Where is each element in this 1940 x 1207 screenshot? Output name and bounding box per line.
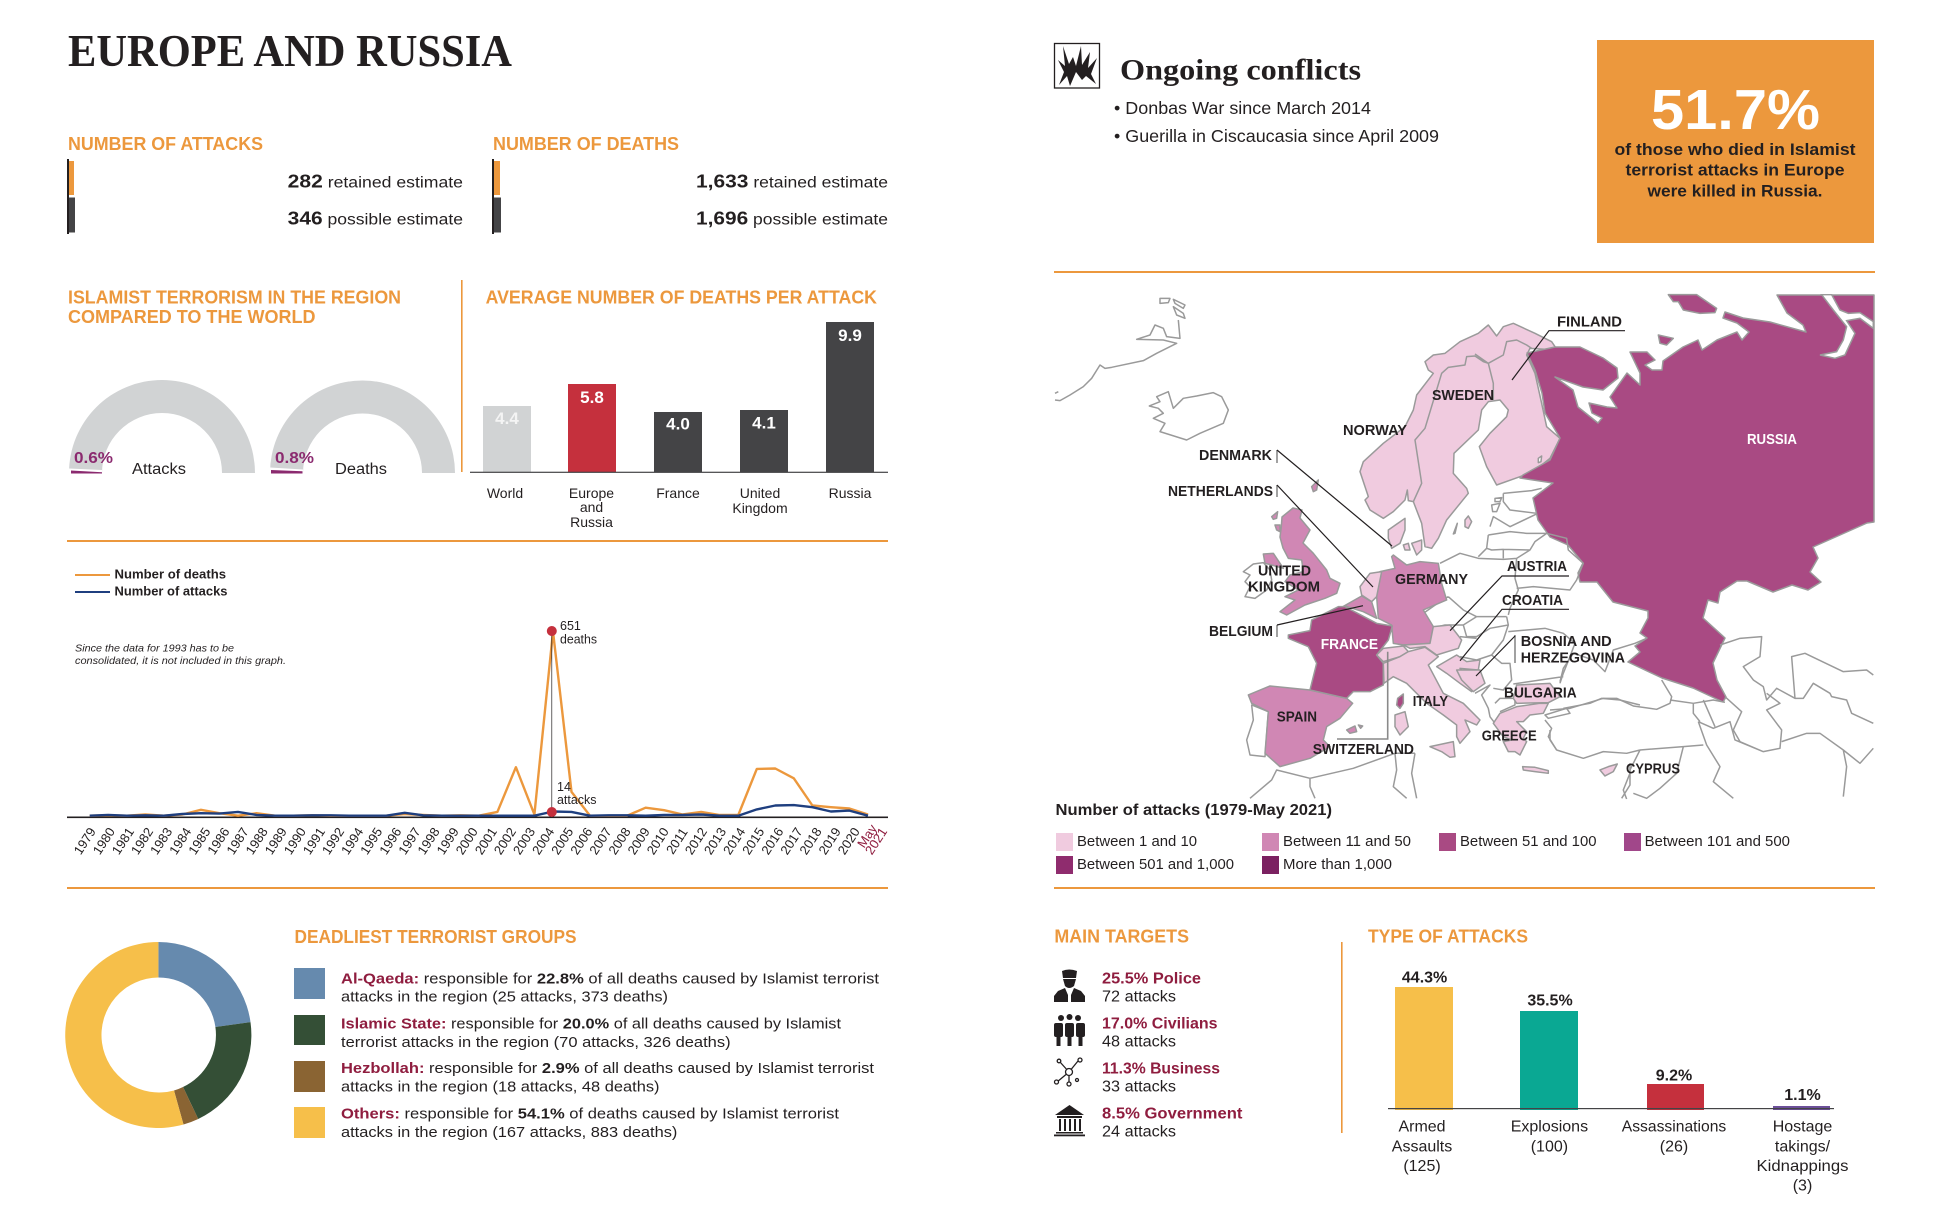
map: country labels: UNITED (1258, 563, 1311, 580)
legend: number of attacks map: Between 501 and 1,000 (1077, 857, 1234, 873)
heading: ongoing conflicts: Ongoing conflicts (1120, 54, 1361, 86)
legend item: Hezbollah: attacks in the region (18 attacks, 48 deaths) (341, 1078, 660, 1096)
series: attacks (90, 805, 868, 816)
map: country labels: AUSTRIA (1507, 558, 1567, 575)
panel: average deaths per attack (470, 288, 888, 530)
legend: number of attacks map (1056, 802, 1790, 874)
map: country labels: CYPRUS (1626, 760, 1680, 777)
legend item: Others: attacks in the region (167 attacks, 883 deaths) (341, 1124, 677, 1141)
legend item: Others (294, 1106, 840, 1141)
x axis labels: 2010 (644, 825, 672, 857)
title: EUROPE AND RUSSIA (68, 25, 512, 76)
list: conflicts: • Donbas War since March 2014 (1114, 98, 1371, 118)
map: country labels: CROATIA (1502, 592, 1563, 609)
x axis labels: 1999 (433, 825, 462, 857)
bar chart: average deaths: Russia (570, 514, 613, 530)
bar chart: type of attacks: (26) (1660, 1139, 1688, 1156)
bars: attacks estimates (67, 159, 75, 234)
bar chart: type of attacks: 35.5% (1527, 993, 1573, 1010)
x axis labels: 2003 (510, 825, 538, 857)
bar chart: type of attacks: (3) (1793, 1178, 1812, 1195)
callout: 51.7%: were killed in Russia. (1646, 182, 1822, 200)
legend item: Al-Qaeda: attacks in the region (25 attacks, 373 deaths) (341, 989, 668, 1006)
x axis labels: 1997 (395, 825, 424, 857)
bar chart: type of attacks (1388, 969, 1848, 1195)
bar chart: average deaths: Kingdom (732, 500, 788, 516)
bar chart: type of attacks: Hostage (1773, 1119, 1832, 1136)
list: conflicts: • Guerilla in Ciscaucasia since April 2009 (1114, 126, 1439, 146)
x axis labels: 2008 (605, 825, 634, 857)
heading: number of deaths: NUMBER OF DEATHS (493, 134, 679, 154)
bar chart: type of attacks: Kidnappings (1756, 1158, 1848, 1175)
map: country labels (1168, 314, 1797, 777)
text: business: 11.3% Business (1102, 1061, 1220, 1078)
bar chart: type of attacks: (100) (1531, 1139, 1568, 1156)
value: retained attacks: 282 retained estimate (288, 170, 463, 192)
bar chart: average deaths: France (656, 485, 700, 501)
bar chart: type of attacks: takings/ (1775, 1139, 1831, 1156)
callout: 51.7%: 51.7% (1651, 78, 1820, 142)
panel: type of attacks (1368, 927, 1848, 1195)
map: country labels: SWEDEN (1432, 387, 1494, 404)
value: possible attacks: 346 possible estimate (288, 208, 463, 228)
x axis labels: 1981 (109, 825, 137, 857)
text: police: 72 attacks (1102, 989, 1176, 1006)
text: government (1102, 1106, 1242, 1141)
callout: 51.7% (1597, 40, 1874, 243)
x axis labels: 1998 (414, 825, 443, 857)
map: country labels: KINGDOM (1248, 579, 1320, 596)
text: business (1102, 1061, 1220, 1096)
map: country labels: GERMANY (1395, 571, 1468, 588)
x axis labels: 1986 (204, 825, 233, 857)
x axis labels: 1989 (262, 825, 290, 857)
x axis labels: 1985 (185, 825, 213, 857)
legend item: Islamic State (294, 1015, 842, 1051)
icon: business network (1054, 1058, 1082, 1086)
x axis labels: 2000 (453, 825, 481, 857)
panel: deadliest terrorist groups (294, 927, 880, 1141)
text: civilians: 48 attacks (1102, 1034, 1176, 1051)
axis (67, 816, 888, 818)
x axis labels: 2019 (815, 825, 844, 857)
x axis labels: 2004 (529, 825, 557, 857)
legend item: Islamic State: Islamic State: responsible for 20.0% of all deaths caused by Islamist (341, 1016, 842, 1032)
map: country labels: BOSNIA AND (1521, 633, 1612, 650)
x axis labels: 2012 (682, 825, 710, 857)
map: attacks per country (1055, 290, 1874, 799)
x axis labels: 1995 (357, 825, 385, 857)
bar chart: type of attacks: Assaults (1392, 1139, 1452, 1156)
map: country labels: FINLAND (1557, 314, 1622, 331)
map: country labels: FRANCE (1321, 636, 1378, 653)
series: deaths (90, 632, 868, 816)
x axis labels: 1984 (166, 825, 194, 857)
callout: 2004 peak: 651 (560, 619, 581, 633)
x axis labels: 2006 (567, 825, 595, 857)
x axis labels: 2001 (472, 825, 500, 857)
bar chart: type of attacks: Assassinations (1622, 1119, 1726, 1136)
bar chart: average deaths: 4.1 (752, 414, 776, 433)
bar chart: type of attacks: Armed (1398, 1119, 1446, 1136)
x axis labels: 2011 (663, 825, 691, 857)
bar chart: type of attacks: 1.1% (1784, 1087, 1821, 1104)
heading: type of attacks: TYPE OF ATTACKS (1368, 927, 1528, 947)
map: country labels: RUSSIA (1747, 431, 1797, 448)
text: police (1102, 970, 1201, 1006)
x axis labels: 2015 (739, 825, 767, 857)
divider (1341, 942, 1343, 1133)
legend: number of attacks map: Between 1 and 10 (1077, 834, 1197, 850)
icon: government building (1054, 1105, 1085, 1136)
value: possible deaths: 1,696 possible estimate (696, 208, 888, 228)
legend: line chart: Number of attacks (114, 584, 228, 598)
x axis labels: 1979 (71, 825, 99, 857)
map: nordic and baltic countries (1360, 323, 1560, 555)
legend item: Al-Qaeda: Al-Qaeda: responsible for 22.8% of all deaths caused by Islamist terrorist (341, 970, 880, 987)
bar chart: average deaths: 9.9 (838, 326, 862, 345)
icon: explosion (1054, 44, 1100, 88)
x axis labels: 2002 (491, 825, 519, 857)
map: caucasus and central asia (1550, 637, 1873, 798)
gauge: deaths: 0.8% (275, 450, 314, 467)
map: leader lines (1277, 331, 1625, 739)
callout: 51.7%: terrorist attacks in Europe (1626, 160, 1844, 180)
heading: main targets: MAIN TARGETS (1054, 927, 1189, 947)
map: country labels: NETHERLANDS (1168, 483, 1273, 500)
legend item: Hezbollah: Hezbollah: responsible for 2.9% of all deaths caused by Islamist terrorist (341, 1060, 875, 1077)
x axis labels: 1980 (90, 825, 118, 857)
x axis labels: 2018 (796, 825, 825, 857)
panel: main targets (1054, 927, 1242, 1141)
x axis labels: 1987 (223, 825, 252, 857)
line chart: deaths and attacks over time (67, 566, 890, 857)
text: business: 33 attacks (1102, 1079, 1176, 1096)
gauge: attacks: Attacks (132, 461, 186, 478)
panel: region compared to world (68, 288, 455, 478)
panel: region compared to world: COMPARED TO THE WORLD (68, 307, 316, 327)
callout: 2004 peak: deaths (560, 632, 597, 646)
map: western and southern europe (1243, 508, 1640, 799)
legend: number of attacks map: Number of attacks (1979-May 2021) (1056, 802, 1332, 819)
map: country labels: SPAIN (1277, 709, 1317, 726)
map: country labels: SWITZERLAND (1313, 741, 1414, 758)
text: government: 24 attacks (1102, 1124, 1176, 1141)
bar chart: type of attacks: (125) (1403, 1158, 1441, 1175)
heading: region vs world: ISLAMIST TERRORISM IN THE REGION (68, 288, 401, 308)
legend item: Islamic State: terrorist attacks in the region (70 attacks, 326 deaths) (341, 1034, 731, 1051)
map: country labels: GREECE (1482, 728, 1537, 745)
divider (461, 280, 463, 472)
bar chart: average deaths: United (740, 485, 780, 501)
callout: 51.7%: of those who died in Islamist (1614, 140, 1856, 159)
panel: number of attacks (67, 134, 463, 234)
x axis labels: 1983 (147, 825, 175, 857)
legend item: Al-Qaeda (294, 968, 880, 1006)
legend item: Others: Others: responsible for 54.1% of deaths caused by Islamist terrorist (341, 1106, 840, 1123)
x axis labels: May (854, 821, 880, 850)
legend: number of attacks map: Between 51 and 100 (1460, 834, 1596, 850)
heading: average deaths: AVERAGE NUMBER OF DEATHS PER ATTACK (486, 288, 877, 308)
x axis labels: 2007 (586, 825, 615, 857)
x axis labels: 2014 (720, 825, 748, 857)
bar chart: type of attacks: Explosions (1511, 1119, 1588, 1136)
map: country labels: DENMARK (1199, 447, 1272, 464)
bars: deaths estimates (492, 159, 501, 234)
callout: 2004 peak: attacks (557, 793, 596, 807)
x axis labels: 1991 (300, 825, 328, 857)
icon: police (1054, 970, 1085, 1002)
map: country labels: ITALY (1413, 693, 1448, 710)
bar chart: average deaths: 5.8 (580, 388, 604, 407)
legend: line chart: Number of deaths (114, 566, 226, 582)
map: country labels: NORWAY (1343, 422, 1407, 439)
note: 1993 data: Since the data for 1993 has to be (75, 642, 234, 654)
x axis labels: 2005 (548, 825, 576, 857)
list: conflicts (1114, 98, 1439, 146)
x axis labels: 2013 (701, 825, 729, 857)
x axis labels: 1994 (338, 825, 366, 857)
x axis labels: 2021 (862, 825, 890, 857)
gauge: deaths: Deaths (335, 461, 387, 478)
text: government: 8.5% Government (1102, 1106, 1242, 1123)
bar chart: type of attacks: 44.3% (1402, 969, 1447, 986)
note: 1993 data (75, 642, 286, 667)
text: civilians: 17.0% Civilians (1102, 1016, 1218, 1033)
heading: deadliest groups: DEADLIEST TERRORIST GROUPS (294, 927, 576, 947)
x axis labels: 2020 (835, 825, 863, 857)
value: retained deaths: 1,633 retained estimate (696, 170, 888, 192)
gauge: deaths (270, 380, 455, 478)
map: country labels: BULGARIA (1504, 684, 1577, 701)
callout: 2004 peak: 14 (557, 780, 571, 794)
x axis labels: 2016 (758, 825, 786, 857)
icon: civilians (1054, 1014, 1085, 1046)
heading: number of attacks: NUMBER OF ATTACKS (68, 134, 263, 154)
map: russia (1520, 290, 1874, 702)
x axis labels (71, 821, 890, 857)
legend item: Hezbollah (294, 1060, 875, 1096)
x axis labels: 1996 (376, 825, 404, 857)
bar chart: average deaths: World (487, 485, 523, 501)
x axis labels: 1990 (281, 825, 309, 857)
text: civilians (1102, 1016, 1218, 1051)
x axis labels: 2017 (777, 825, 806, 857)
gauge: attacks (69, 380, 255, 478)
x axis labels: 1992 (319, 825, 347, 857)
note: 1993 data: consolidated, it is not included in this graph. (75, 655, 286, 667)
legend: number of attacks map: Between 11 and 50 (1283, 834, 1411, 850)
x axis labels: 1982 (128, 825, 156, 857)
map: country labels: HERZEGOVINA (1521, 650, 1625, 667)
gauge: attacks: 0.6% (74, 450, 113, 467)
bar chart: average deaths (470, 322, 888, 530)
panel: ongoing conflicts (1054, 44, 1439, 146)
x axis labels: 2009 (624, 825, 653, 857)
panel: number of deaths (492, 134, 888, 234)
bar chart: average deaths: 4.4 (495, 409, 519, 428)
x axis labels: 1988 (242, 825, 271, 857)
bar chart: average deaths: Europe (569, 485, 614, 501)
bar chart: average deaths: Russia (829, 485, 872, 501)
map: greenland and iceland (1055, 298, 1318, 532)
legend: number of attacks map: Between 101 and 500 (1645, 834, 1790, 850)
callout: 2004 peak (547, 619, 597, 817)
map: country labels: BELGIUM (1209, 623, 1273, 640)
bar chart: type of attacks: 9.2% (1656, 1068, 1692, 1085)
bar chart: average deaths: and (580, 499, 603, 515)
legend: line chart (75, 566, 228, 598)
text: police: 25.5% Police (1102, 970, 1201, 987)
donut chart: deadliest groups (65, 942, 251, 1128)
legend: number of attacks map: More than 1,000 (1283, 857, 1392, 873)
bar chart: average deaths: 4.0 (666, 415, 690, 434)
